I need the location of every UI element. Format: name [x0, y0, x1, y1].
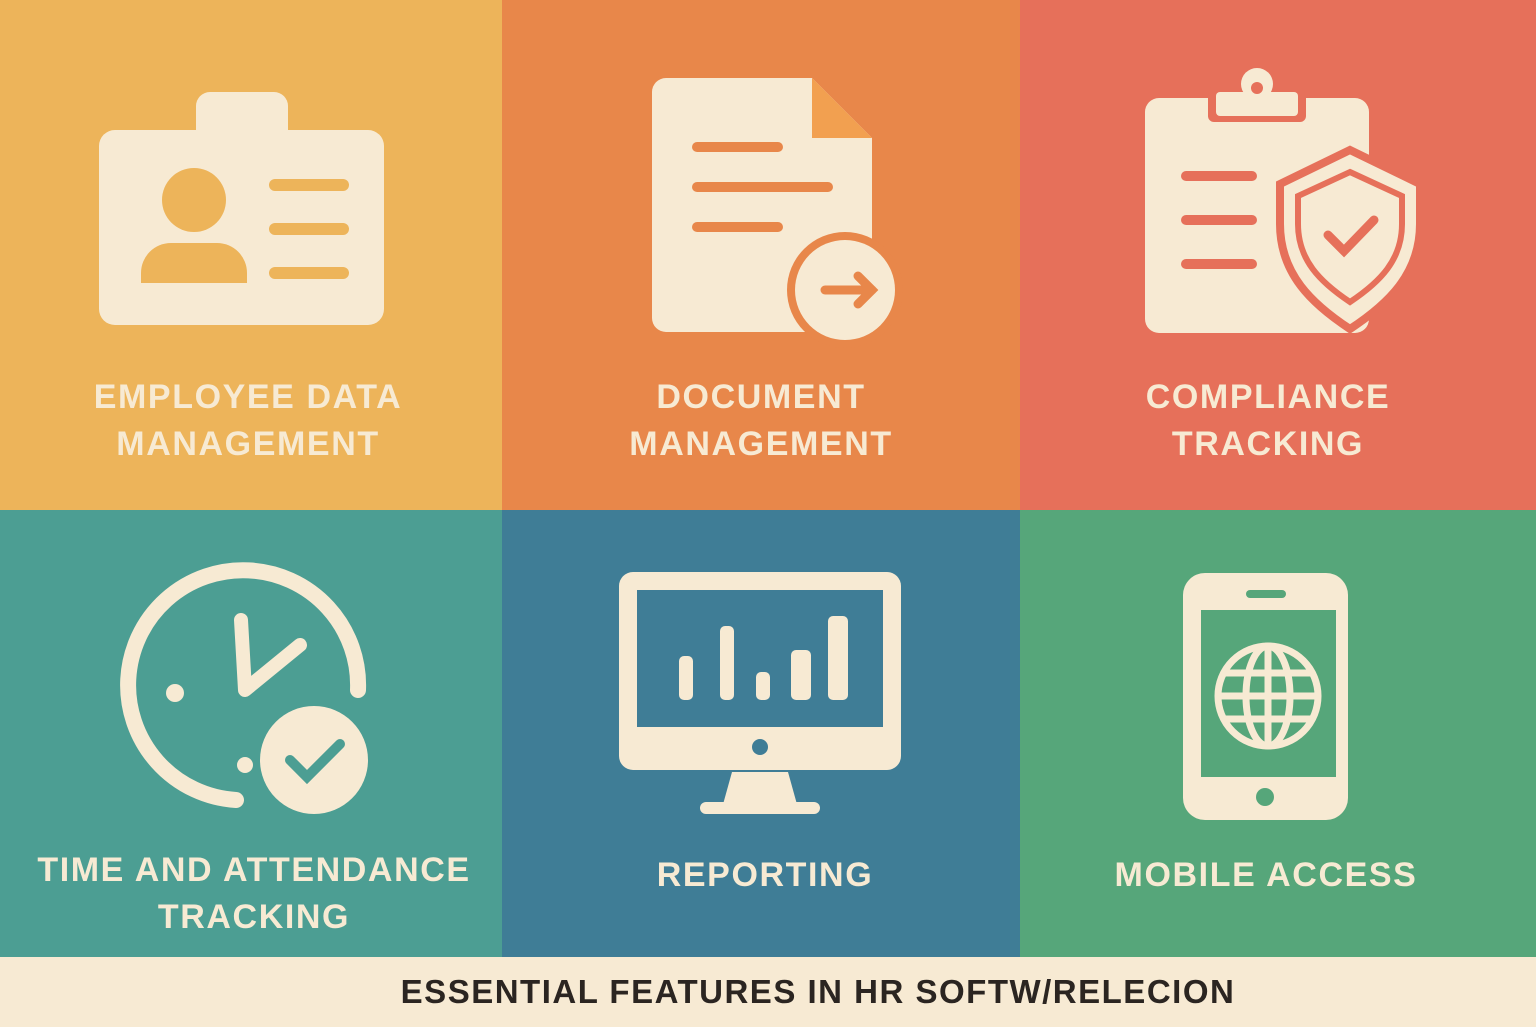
panel: time and attendance tracking	[0, 510, 502, 957]
label: MANAGEMENT	[116, 425, 380, 463]
icon: clipboard with shield	[1145, 68, 1416, 333]
icon: phone with globe	[1183, 573, 1348, 820]
footer title: ESSENTIAL FEATURES IN HR SOFTW/RELECION	[401, 973, 1235, 1010]
label: COMPLIANCE	[1146, 378, 1390, 416]
label: MANAGEMENT	[629, 425, 893, 463]
label: TIME AND ATTENDANCE	[37, 851, 471, 889]
label	[1146, 378, 1390, 463]
label	[94, 378, 402, 463]
label	[629, 378, 893, 463]
label: DOCUMENT	[656, 378, 866, 416]
panel: reporting	[502, 510, 1020, 957]
label: EMPLOYEE DATA	[94, 378, 402, 416]
icon: clock with check	[120, 562, 368, 814]
label: TRACKING	[158, 898, 350, 936]
label: MOBILE ACCESS	[1115, 856, 1417, 894]
panel: mobile access	[1020, 510, 1536, 957]
label	[37, 851, 471, 936]
panel: employee data management	[0, 0, 502, 510]
icon: id card	[99, 92, 384, 325]
icon: document with arrow	[652, 78, 895, 340]
panel: compliance tracking	[1020, 0, 1536, 510]
label: TRACKING	[1172, 425, 1364, 463]
label: REPORTING	[657, 856, 873, 894]
panel: document management	[502, 0, 1020, 510]
icon: monitor with bar chart	[619, 572, 901, 814]
